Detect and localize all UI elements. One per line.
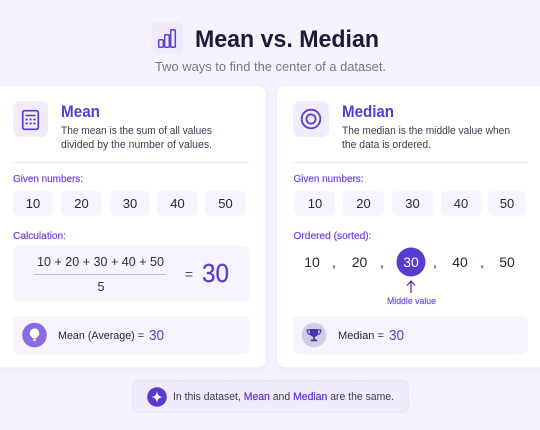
label: middle value: Middle value bbox=[387, 296, 436, 307]
given numbers chips bbox=[294, 191, 526, 216]
given numbers chips: 20 bbox=[356, 196, 371, 211]
result: mean: 30 bbox=[149, 327, 164, 344]
given numbers chips: 30 bbox=[123, 196, 137, 211]
subtitle: Two ways to find the center of a dataset. bbox=[155, 59, 386, 74]
card background bbox=[277, 86, 540, 367]
ordered sequence bbox=[304, 248, 515, 276]
given numbers chips: 30 bbox=[405, 196, 420, 211]
description: median bbox=[342, 125, 510, 151]
heading: mean: Mean bbox=[61, 103, 100, 121]
ordered sequence: 20 bbox=[352, 254, 367, 270]
result: median bbox=[293, 316, 528, 354]
calculation box: = bbox=[185, 266, 193, 282]
description: mean: The mean is the sum of all values bbox=[61, 125, 212, 137]
given numbers chips: 20 bbox=[74, 196, 89, 211]
label: given numbers: Given numbers: bbox=[294, 174, 364, 185]
given numbers chips: 40 bbox=[170, 196, 185, 211]
ordered sequence: 40 bbox=[452, 254, 468, 270]
title: Mean vs. Median bbox=[195, 26, 379, 53]
ordered sequence: , bbox=[480, 254, 484, 270]
ordered sequence: 50 bbox=[499, 254, 515, 270]
description: median: the data is ordered. bbox=[342, 139, 431, 151]
given numbers chips bbox=[13, 191, 246, 216]
heading: median: Median bbox=[342, 103, 394, 121]
given numbers chips: 50 bbox=[500, 196, 514, 211]
icon: target bbox=[293, 101, 329, 137]
ordered sequence: 10 bbox=[304, 254, 320, 270]
callout bbox=[132, 380, 408, 412]
card background bbox=[0, 86, 266, 367]
calculation box: 30 bbox=[202, 258, 229, 288]
panel: median bbox=[277, 86, 540, 367]
result: median: Median = bbox=[338, 330, 384, 342]
result: mean: Mean (Average) = bbox=[58, 330, 144, 342]
icon: light bulb bbox=[22, 323, 47, 347]
description: mean bbox=[61, 125, 212, 151]
ordered sequence: 30 bbox=[403, 254, 419, 270]
result: median: 30 bbox=[389, 327, 404, 344]
callout: In this dataset, Mean and Median are the same. bbox=[173, 391, 394, 403]
icon: bar chart bbox=[152, 22, 183, 54]
given numbers chips: 10 bbox=[26, 196, 40, 211]
label: given numbers: Given numbers: bbox=[13, 174, 83, 185]
calculation box: 5 bbox=[98, 280, 105, 294]
description: mean: divided by the number of values. bbox=[61, 139, 212, 151]
result: mean bbox=[13, 316, 250, 354]
ordered sequence: , bbox=[380, 254, 384, 270]
calculation box bbox=[13, 246, 250, 301]
calculation box: 10 + 20 + 30 + 40 + 50 bbox=[37, 255, 164, 269]
given numbers chips: 10 bbox=[308, 196, 322, 211]
icon: calculator bbox=[13, 101, 48, 137]
panel: mean bbox=[0, 86, 266, 367]
description: median: The median is the middle value when bbox=[342, 125, 510, 137]
arrow: to middle value bbox=[407, 281, 415, 293]
ordered sequence: , bbox=[433, 254, 437, 270]
label: calculation: Calculation: bbox=[13, 231, 66, 242]
icon: sparkle bbox=[147, 387, 167, 407]
given numbers chips: 40 bbox=[454, 196, 468, 211]
icon: trophy bbox=[302, 323, 326, 347]
ordered sequence: , bbox=[332, 254, 336, 270]
label: ordered: Ordered (sorted): bbox=[294, 231, 372, 242]
header bbox=[152, 22, 386, 74]
given numbers chips: 50 bbox=[218, 196, 233, 211]
